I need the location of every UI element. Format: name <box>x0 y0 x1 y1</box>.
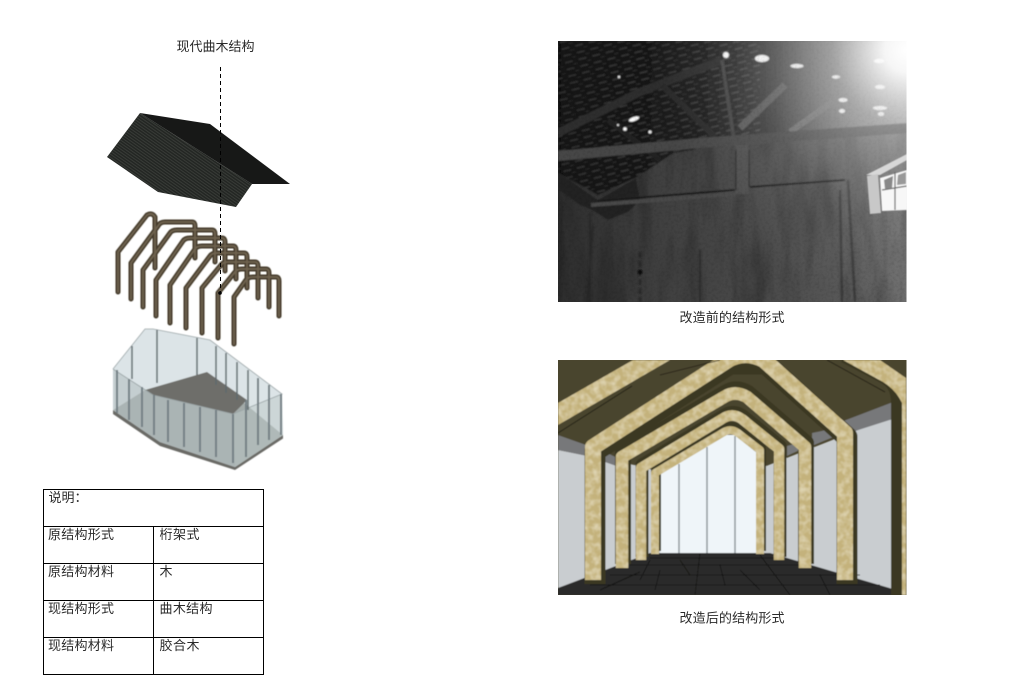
table text: 说明： <box>48 490 88 505</box>
side walls <box>558 450 660 588</box>
trusses <box>558 60 907 194</box>
table text: 曲木结构 <box>160 601 212 616</box>
table text: 木 <box>160 564 173 579</box>
arches far to near <box>595 355 899 600</box>
table text <box>48 490 212 653</box>
skylight spots <box>617 52 887 134</box>
caption: before: 改造前的结构形式 <box>680 310 784 325</box>
caption: after: 改造后的结构形式 <box>680 610 784 626</box>
ceiling bands <box>558 360 907 473</box>
roof layer <box>107 113 290 207</box>
table text: 原结构材料 <box>48 564 114 579</box>
glass end wall <box>660 435 756 553</box>
table text: 现结构形式 <box>48 601 114 616</box>
dashed axis line <box>218 67 222 295</box>
title: modern bent wood structure: 现代曲木结构 <box>176 39 254 54</box>
photo: before renovation, timber truss <box>558 41 907 302</box>
bent wood frames <box>118 214 279 344</box>
table text: 桁架式 <box>160 527 200 542</box>
table text: 原结构形式 <box>48 527 114 542</box>
table text: 现结构材料 <box>48 638 114 653</box>
table: structure description <box>44 490 264 674</box>
table text: 胶合木 <box>160 638 200 653</box>
window <box>866 154 907 214</box>
dark floor <box>558 553 907 595</box>
photo: after renovation, bent wood arches <box>558 355 907 600</box>
dark roof <box>558 41 907 195</box>
bent wood tan bands <box>593 355 845 580</box>
glass walls and floor layer <box>113 329 283 470</box>
exploded axonometric diagram <box>107 67 290 470</box>
